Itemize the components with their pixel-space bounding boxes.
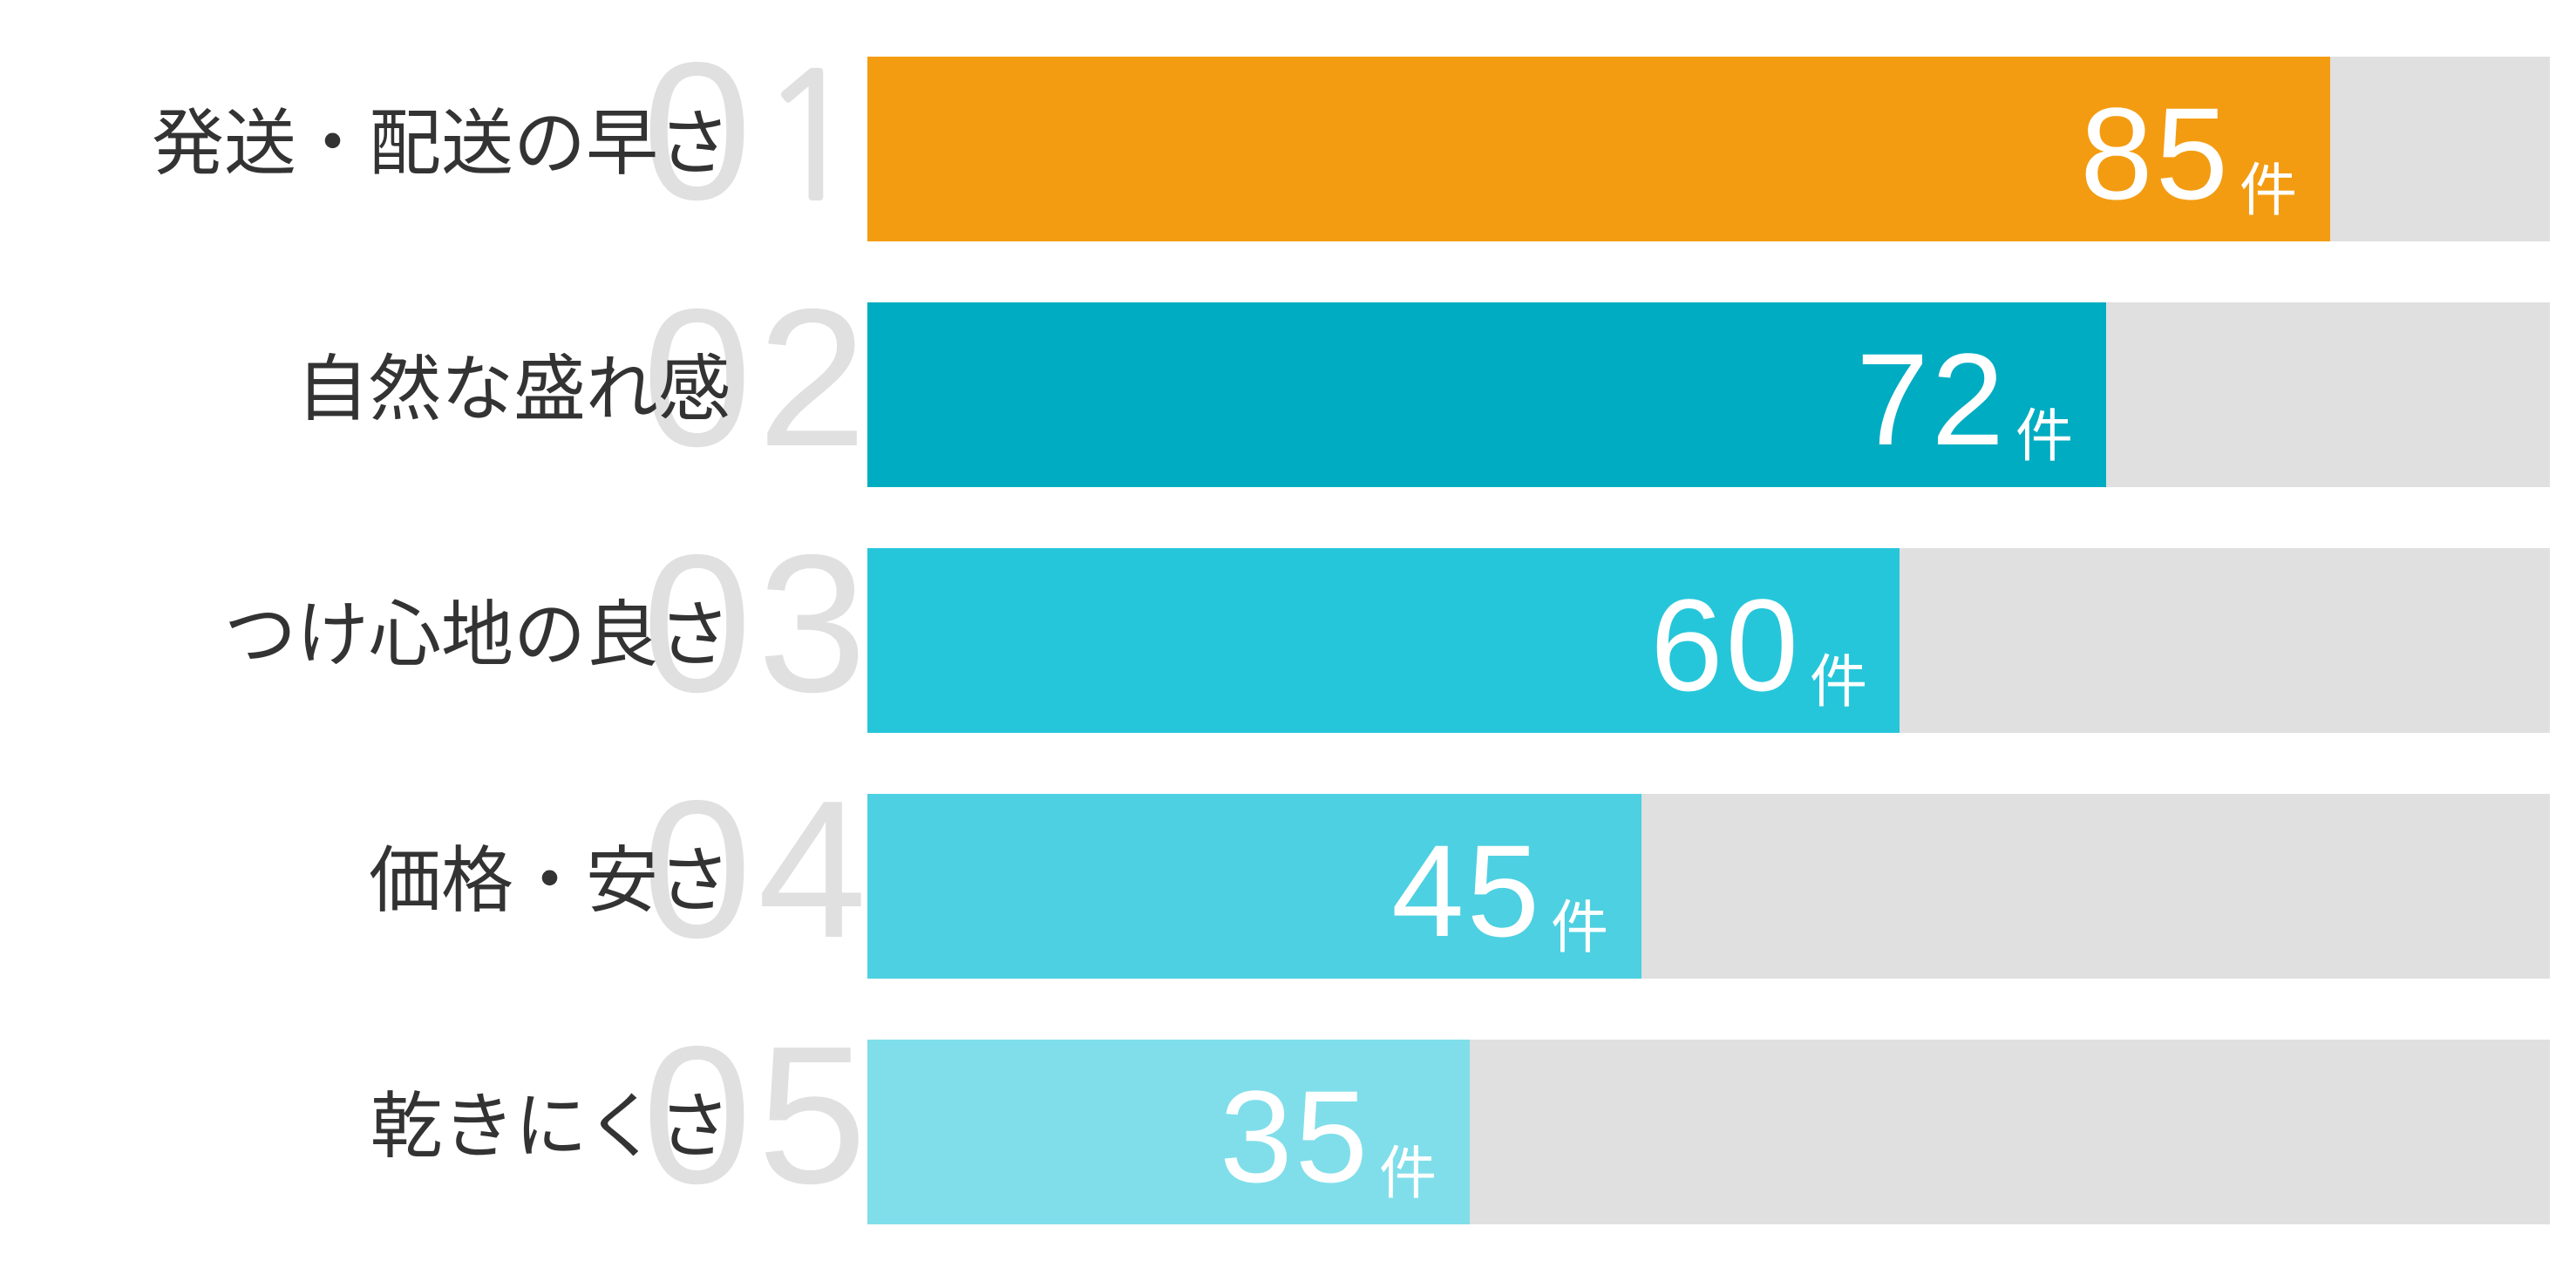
- row 2: natural volume: [296, 268, 2550, 487]
- value 85: 85: [2080, 80, 2231, 227]
- rank number 01: 0: [642, 21, 751, 241]
- unit: 件: [2015, 403, 2073, 468]
- label: shipping speed: 発送・配送の早さ: [152, 103, 731, 184]
- bar 72: [867, 302, 2106, 487]
- unit: 件: [2240, 158, 2297, 222]
- value 45: 45: [1391, 817, 1542, 964]
- label: price: 価格・安さ: [369, 840, 731, 921]
- unit: 件: [1810, 649, 1867, 714]
- track 1: [867, 57, 2550, 241]
- row 5: quick drying: [370, 1005, 2550, 1224]
- row 3: comfort: [224, 513, 2550, 733]
- track 4: [867, 794, 2550, 979]
- rank number 04: 04: [642, 759, 867, 979]
- label: quick drying: 乾きにくさ: [370, 1086, 731, 1167]
- value 72: 72: [1856, 326, 2007, 472]
- value 35: 35: [1220, 1063, 1370, 1210]
- bar 60: [867, 548, 1900, 733]
- rank number 05: 05: [642, 1005, 867, 1224]
- track 2: [867, 302, 2550, 487]
- rank number 02: 02: [642, 268, 867, 487]
- bar 85: [867, 57, 2330, 241]
- value 60: 60: [1650, 572, 1801, 718]
- row 4: price: [369, 759, 2550, 979]
- rank number 01: 1: [758, 50, 863, 224]
- label: natural volume: 自然な盛れ感: [296, 349, 731, 430]
- row 1: shipping speed: [152, 21, 2550, 241]
- unit: 件: [1379, 1141, 1437, 1205]
- rank number 03: 03: [642, 513, 867, 733]
- track 5: [867, 1040, 2550, 1224]
- track 3: [867, 548, 2550, 733]
- bar 45: [867, 794, 1641, 979]
- label: comfort: つけ心地の良さ: [224, 594, 731, 675]
- bar 35: [867, 1040, 1470, 1224]
- unit: 件: [1551, 895, 1608, 959]
